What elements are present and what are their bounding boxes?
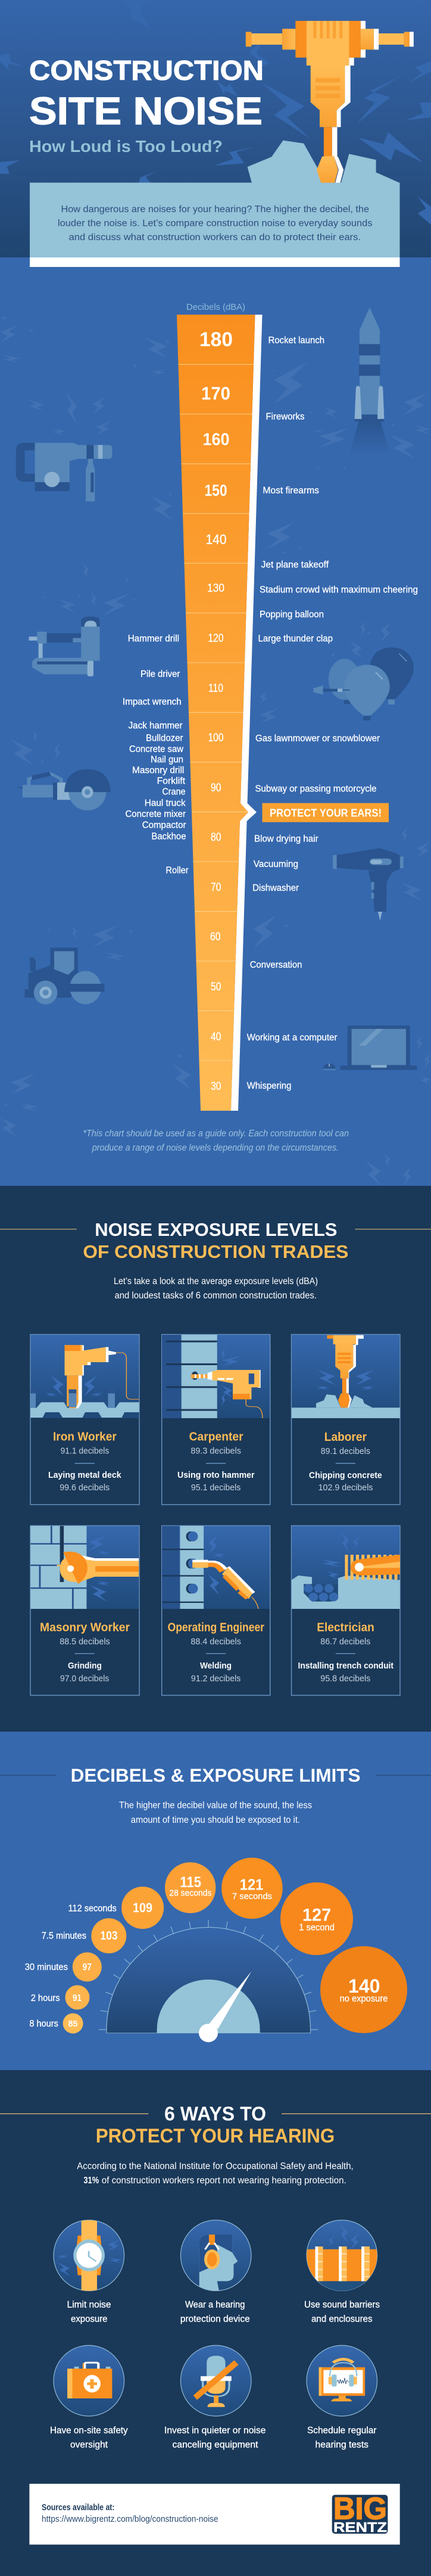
exposure bubbles: 85 <box>68 2019 77 2029</box>
protect intro: 31% <box>83 2176 99 2186</box>
tip: limit noise exposure: exposure <box>71 2314 107 2325</box>
tip: limit noise exposure: Limit noise <box>67 2300 111 2310</box>
footnote: produce a range of noise levels depending on the circumstances. <box>92 1143 339 1153</box>
panel: masonry worker <box>30 1525 139 1695</box>
exposure bubbles: no exposure <box>340 1994 388 2004</box>
icon: watch <box>57 2220 122 2291</box>
protect background <box>0 2070 431 2576</box>
trades heading: NOISE EXPOSURE LEVELS <box>95 1219 338 1240</box>
everyday sound labels: Dishwasher <box>252 883 299 893</box>
icon: balloons and dart <box>313 648 414 720</box>
trades heading <box>0 1219 431 1262</box>
panel: iron worker: Laying metal deck <box>48 1470 121 1480</box>
sources panel: https://www.bigrentz.com/blog/construction-noise <box>42 2515 218 2524</box>
construction tool labels: Bulldozer <box>146 734 183 744</box>
header background <box>0 0 431 257</box>
chart: decibel scale: 110 <box>208 682 223 695</box>
tip: wear a hearing protection device: Wear a hearing <box>185 2300 245 2310</box>
panel: masonry worker: 97.0 decibels <box>60 1674 109 1684</box>
panel: laborer <box>291 1335 400 1505</box>
exposure bubbles: 28 seconds <box>169 1888 211 1898</box>
intro panel <box>30 141 400 267</box>
tip: limit noise exposure <box>54 2220 124 2325</box>
callout: protect your ears: PROTECT YOUR EARS! <box>270 807 382 819</box>
exposure bubbles: 7 seconds <box>232 1891 272 1901</box>
trades intro: Let’s take a look at the average exposure levels (dBA) <box>114 1276 318 1287</box>
icon: rotary hammer drill <box>16 443 112 501</box>
panel: carpenter: 89.3 decibels <box>190 1446 241 1456</box>
tip: wear a hearing protection device <box>180 2220 251 2325</box>
panel: electrician: 95.8 decibels <box>320 1674 370 1684</box>
panel: electrician: Installing trench conduit <box>298 1661 393 1671</box>
rubble <box>248 141 399 184</box>
panel: electrician <box>291 1525 400 1695</box>
panel: masonry worker: Grinding <box>68 1661 102 1671</box>
icon: trencher and conduit <box>291 1531 400 1609</box>
chart lightning bolts <box>0 315 431 1186</box>
icon: welding torch <box>162 1526 258 1609</box>
panel: operating engineer: 91.2 decibels <box>191 1674 241 1684</box>
panel: masonry worker: 88.5 decibels <box>60 1636 110 1646</box>
construction tool labels: Masonry drill <box>132 765 184 775</box>
chart: decibel scale: 180 <box>199 328 233 351</box>
tip: invest in quieter or noise canceling equipment: Invest in quieter or noise <box>164 2425 266 2435</box>
construction tool labels <box>123 634 189 876</box>
panel: operating engineer: Welding <box>200 1661 232 1671</box>
icon: monitor with headphones <box>319 2359 365 2401</box>
limits intro <box>119 1801 312 1825</box>
panel: iron worker: 91.1 decibels <box>61 1446 109 1456</box>
icon: concrete saw <box>18 769 111 810</box>
chart: decibel scale: 120 <box>208 632 224 645</box>
everyday sound labels: Rocket launch <box>268 335 324 346</box>
axis label: Decibels (dBA) <box>186 302 245 312</box>
trades background <box>0 1186 431 1732</box>
logo: BigRentz: BIG <box>333 2491 387 2526</box>
panel: carpenter: Carpenter <box>189 1431 243 1444</box>
panel: masonry worker: Masonry Worker <box>40 1621 130 1634</box>
construction tool labels: Backhoe <box>151 832 186 842</box>
callout: protect your ears <box>262 803 389 822</box>
everyday sound labels: Fireworks <box>266 412 305 422</box>
construction tool labels: Crane <box>162 787 186 797</box>
title <box>29 55 264 132</box>
tip: use sound barriers and enclosures: and enclosures <box>311 2314 373 2325</box>
construction tool labels: Concrete mixer <box>125 809 186 819</box>
panel: operating engineer: 88.4 decibels <box>190 1636 241 1646</box>
exposure bubbles: 109 <box>133 1900 152 1915</box>
exposure bubbles: 103 <box>100 1929 118 1943</box>
footnote: *This chart should be used as a guide only. Each construction tool can <box>83 1129 349 1139</box>
icon: hair dryer <box>333 848 404 921</box>
construction tool labels: Haul truck <box>145 798 186 808</box>
title: SITE NOISE <box>29 89 263 132</box>
limits intro: amount of time you should be exposed to it. <box>131 1815 300 1825</box>
protect heading: PROTECT YOUR HEARING <box>96 2125 335 2147</box>
icon: masonry grinder <box>30 1526 139 1609</box>
sources panel <box>29 2484 400 2544</box>
tip: schedule regular hearing tests <box>307 2345 377 2450</box>
limits intro: The higher the decibel value of the sound, the less <box>119 1801 312 1811</box>
chart: decibel scale: 130 <box>207 582 224 595</box>
chart: decibel scale: 150 <box>205 481 227 499</box>
exposure bubbles: 91 <box>73 1993 82 2003</box>
exposure time labels: 8 hours <box>29 2019 58 2029</box>
footnote <box>83 1129 349 1153</box>
exposure bubbles: 121 <box>240 1876 263 1894</box>
panel: operating engineer <box>162 1525 270 1695</box>
construction tool labels: Nail gun <box>151 754 183 765</box>
panel: laborer: 89.1 decibels <box>321 1446 370 1456</box>
exposure time labels: 7.5 minutes <box>42 1931 86 1941</box>
panel: laborer: Chipping concrete <box>309 1471 382 1480</box>
panel: iron worker: 99.6 decibels <box>60 1483 110 1493</box>
limits heading: DECIBELS & EXPOSURE LIMITS <box>71 1764 361 1786</box>
everyday sound labels: Most firearms <box>263 486 319 496</box>
panel: iron worker <box>30 1335 139 1505</box>
icon: head with earmuffs <box>199 2235 238 2291</box>
sources panel: Sources available at: <box>42 2503 114 2513</box>
icon: carpenter roto hammer <box>162 1335 263 1418</box>
protect intro: of construction workers report not wearing hearing protection. <box>102 2176 346 2186</box>
panel: electrician: 86.7 decibels <box>320 1636 370 1646</box>
everyday sound labels: Subway or passing motorcycle <box>255 784 377 794</box>
chart: decibel scale: 80 <box>211 831 221 844</box>
chart: exposure gauge <box>99 1920 318 2042</box>
chart: decibel scale: 70 <box>211 881 221 894</box>
icon: first aid kit <box>67 2363 112 2398</box>
header lightning bolts <box>0 0 431 225</box>
trades heading: OF CONSTRUCTION TRADES <box>83 1241 348 1262</box>
construction tool labels: Roller <box>165 866 189 876</box>
icon: iron worker tool <box>30 1345 139 1418</box>
gauge needle <box>199 1971 251 2042</box>
tip: wear a hearing protection device: protection device <box>180 2314 250 2325</box>
everyday sound labels: Large thunder clap <box>258 634 333 644</box>
chart: decibel scale: 90 <box>211 782 221 794</box>
trades intro: and loudest tasks of 6 common construction trades. <box>114 1291 317 1301</box>
chart: decibel scale: 50 <box>211 981 221 993</box>
logo: BigRentz: RENTZ <box>333 2519 387 2535</box>
construction tool labels: Jack hammer <box>129 721 183 731</box>
title: CONSTRUCTION <box>29 55 264 86</box>
everyday sound labels: Jet plane takeoff <box>261 560 329 570</box>
chart: decibel scale: 30 <box>211 1080 221 1093</box>
chart: decibel scale: 60 <box>210 931 220 943</box>
icon: crossed out microphone <box>193 2356 239 2407</box>
trades intro <box>114 1276 318 1301</box>
subtitle: How Loud is Too Loud? <box>29 137 223 156</box>
everyday sound labels: Working at a computer <box>247 1033 338 1043</box>
icon: laborer jackhammer <box>291 1335 400 1418</box>
everyday sound labels: Stadium crowd with maximum cheering <box>260 585 418 595</box>
everyday sound labels: Popping balloon <box>260 610 324 620</box>
exposure time labels: 2 hours <box>31 1993 60 2003</box>
construction tool labels: Compactor <box>142 821 186 831</box>
icon: jackhammer <box>246 21 414 183</box>
construction tool labels: Pile driver <box>140 669 180 679</box>
tip: have on-site safety oversight: Have on-site safety <box>50 2425 128 2435</box>
intro panel: How dangerous are noises for your hearing? The higher the decibel, the <box>61 204 369 215</box>
chart: decibel scale: 140 <box>206 532 226 547</box>
panel: electrician: Electrician <box>317 1621 374 1634</box>
panel: iron worker: Iron Worker <box>53 1431 117 1444</box>
chart: decibel scale: 160 <box>202 430 230 449</box>
tip: schedule regular hearing tests: Schedule regular <box>307 2425 376 2435</box>
tip: have on-site safety oversight <box>50 2345 128 2450</box>
exposure bubbles: 127 <box>302 1905 331 1925</box>
icon: rocket <box>349 307 391 456</box>
chart background <box>0 257 431 1186</box>
exposure time labels <box>25 1904 117 2029</box>
exposure bubbles: 140 <box>348 1975 380 1997</box>
chart: decibel scale <box>177 302 262 1111</box>
intro panel: and discuss what construction workers can do to protect their ears. <box>69 232 361 243</box>
panel: operating engineer: Operating Engineer <box>168 1621 264 1634</box>
everyday sound labels: Blow drying hair <box>254 834 318 844</box>
chart: decibel scale: 40 <box>211 1031 221 1043</box>
tip: invest in quieter or noise canceling equipment <box>164 2345 266 2450</box>
construction tool labels: Forklift <box>157 776 186 786</box>
everyday sound labels: Vacuuming <box>254 859 298 869</box>
tip: use sound barriers and enclosures <box>304 2220 380 2325</box>
exposure bubbles: 115 <box>180 1874 201 1891</box>
construction tool labels: Concrete saw <box>129 744 183 754</box>
icon: nail gun <box>29 617 100 676</box>
icon: laptop and mouse <box>323 1026 417 1070</box>
everyday sound labels: Conversation <box>250 960 302 970</box>
panel: carpenter <box>162 1335 270 1505</box>
panel: carpenter: Using roto hammer <box>177 1470 255 1480</box>
everyday sound labels: Gas lawnmower or snowblower <box>255 734 380 744</box>
tip: invest in quieter or noise canceling equipment: canceling equipment <box>173 2440 258 2450</box>
everyday sound labels: Whispering <box>247 1081 291 1091</box>
tip: use sound barriers and enclosures: Use sound barriers <box>304 2300 380 2310</box>
exposure time labels: 112 seconds <box>68 1904 117 1914</box>
construction tool labels: Hammer drill <box>128 634 179 644</box>
exposure bubbles <box>63 1858 407 2034</box>
intro panel: louder the noise is. Let’s compare construction noise to everyday sounds <box>58 218 373 229</box>
exposure bubbles: 97 <box>82 1961 92 1972</box>
limits background <box>0 1732 431 2070</box>
panel: laborer: Laborer <box>324 1431 367 1444</box>
protect intro <box>77 2161 354 2186</box>
exposure bubbles: 1 second <box>299 1922 335 1933</box>
icon: sound barrier wall <box>307 2224 377 2291</box>
protect intro: According to the National Institute for Occupational Safety and Health, <box>77 2161 354 2171</box>
protect heading <box>0 2103 431 2147</box>
tip: have on-site safety oversight: oversight <box>70 2440 108 2450</box>
icon: road roller <box>25 947 104 1005</box>
chart: decibel scale: 100 <box>208 732 224 744</box>
exposure time labels: 30 minutes <box>25 1962 68 1972</box>
chart: decibel scale: 170 <box>201 383 230 404</box>
tip: schedule regular hearing tests: hearing tests <box>316 2440 368 2450</box>
construction tool labels: Impact wrench <box>123 697 182 707</box>
protect heading: 6 WAYS TO <box>164 2103 266 2125</box>
panel: laborer: 102.9 decibels <box>318 1483 373 1493</box>
panel: carpenter: 95.1 decibels <box>191 1483 241 1493</box>
everyday sound labels <box>247 335 418 1091</box>
